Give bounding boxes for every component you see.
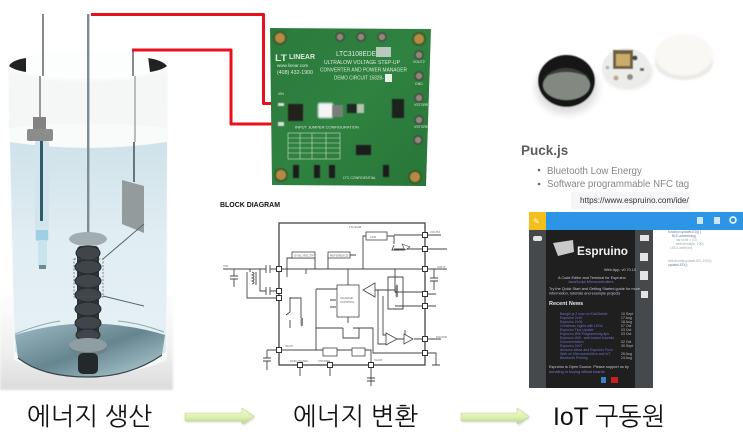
mounting holes (274, 32, 425, 183)
board silkscreen labels: VOUT2 (413, 60, 425, 64)
water (10, 142, 167, 372)
code editor text: BLE.advertising( (672, 234, 697, 238)
news list: Amazon Alexa and Espruino Puck (560, 348, 613, 352)
board silkscreen labels: INPUT JUMPER CONFIGURATION (295, 124, 359, 130)
panel: energy production beaker illustration (0, 14, 173, 390)
schematic labels: SYNC RECTIFY (294, 254, 316, 258)
board logo and title text (275, 47, 407, 82)
news list: 17 Aug (621, 316, 632, 320)
news list: Bluetooth Printing (560, 356, 588, 360)
schematic labels: CHARGE (340, 296, 353, 300)
arrow: conversion to IoT power (461, 408, 530, 426)
board logo and title text: www.linear.com (277, 63, 309, 68)
page text: Try the Quick Start and Getting Started guide for more (549, 287, 640, 291)
Espruino logo (553, 240, 628, 258)
schematic labels: VSTORE (318, 359, 330, 363)
news list: 03 Oct (621, 328, 631, 332)
schematic labels: VOUT (437, 265, 446, 269)
beaker glass (8, 52, 168, 376)
code editor text: setInterval(updateLED, 1000); (668, 259, 712, 263)
reference electrode (27, 14, 53, 269)
news list: Documentation (560, 340, 584, 344)
board logo and title text: (408) 432-1900 (277, 70, 313, 76)
news list: Espruino Wifi - web-based tutorials (560, 336, 614, 340)
board silkscreen labels: GND (415, 82, 423, 86)
panel: LTC3108 converter circuit board (270, 28, 431, 186)
news list: Espruino Wifi Programming tips (560, 332, 609, 336)
news list: 18 Aug (621, 320, 632, 324)
side rails (529, 230, 546, 388)
news list: Espruino 2v10 (560, 316, 582, 320)
news list: 10 Sept (621, 312, 633, 316)
code editor text: function updateLED() { (668, 230, 702, 234)
feature list: Bluetooth Low Energy (547, 166, 642, 177)
schematic labels: CONTROL (340, 300, 355, 304)
label: IoT power source: IoT 구동원 (553, 403, 665, 431)
jumper configuration table (288, 133, 340, 159)
schematic blocks (292, 232, 413, 356)
toolbar (546, 212, 743, 230)
Espruino logo: Espruino (577, 244, 628, 258)
schematic labels: PGOOD (436, 335, 448, 339)
board logo and title text: LTC3108EDE (336, 51, 376, 58)
panel: block diagram schematic (220, 200, 448, 386)
feature list (538, 166, 689, 190)
schematic labels: VLDO (374, 358, 383, 362)
news list: Espruino Tips Update (560, 328, 594, 332)
board logo and title text: CONVERTER AND POWER MANAGER (320, 68, 407, 74)
schematic labels: VOUT2 (430, 230, 440, 234)
schematic labels: VAUX (285, 344, 293, 348)
board logo and title text: ULTRALOW VOLTAGE STEP-UP (324, 60, 400, 66)
zoom callout lines (103, 224, 144, 306)
news list: Espruino 2v09 (560, 320, 582, 324)
page text: Recent News (549, 301, 583, 307)
feature list: Software programmable NFC tag (547, 179, 689, 190)
social buttons (601, 377, 606, 383)
schematic labels: REFERENCE (330, 254, 349, 258)
schematic labels: GND (SGND) (290, 359, 308, 363)
page text: JavaScript Microcontrollers (568, 280, 614, 284)
panel: Espruino IDE screenshot (529, 212, 743, 388)
panel: Puck.js product photo (521, 34, 713, 209)
arrow: production to conversion (185, 408, 255, 426)
board silkscreen labels: VIN (278, 92, 284, 96)
schematic labels: LDO (370, 235, 377, 239)
news list: 30 Sept (621, 344, 633, 348)
panel: Puck.js product photo: https://www.espruino.com/ide/ (580, 196, 689, 205)
counter electrode (122, 50, 144, 233)
news list: 03 Oct (621, 332, 631, 336)
news list: Espruino 2v07 (560, 344, 582, 348)
panel: Espruino IDE screenshot: Espruino is Open Source. Please support us by (549, 365, 629, 369)
code editor text: var level = 0.5; (676, 238, 698, 242)
news list: 02 Oct (621, 340, 631, 344)
chip outline and traces (223, 223, 447, 386)
page text (549, 268, 640, 307)
board logo and title text: DEMO CIRCUIT 1582B- (334, 76, 384, 82)
white silicone cover (655, 34, 713, 80)
news list: Bangle.js 2 now on KickStarter (560, 312, 608, 316)
panel: Espruino IDE screenshot: donating or buying official boards (549, 370, 605, 374)
page text: A Code Editor and Terminal for Espruino (558, 276, 626, 280)
board logo and title text: LT (275, 53, 287, 64)
page text: Web App, v0.70.10 (604, 268, 636, 272)
beaker floor reflection (15, 324, 165, 377)
schematic labels: LTC3108 (349, 225, 361, 229)
terminal pads (276, 232, 428, 368)
heading: block diagram: BLOCK DIAGRAM (220, 200, 280, 209)
board components (278, 99, 404, 178)
panel: Espruino IDE screenshot: ✎ (533, 217, 540, 226)
board logo and title text: LINEAR (289, 54, 315, 61)
red wires from electrodes to board (91, 14, 281, 124)
board silkscreen labels (278, 60, 429, 180)
code editor text: LED1.write(on); (670, 246, 693, 250)
label: energy production: 에너지 생산 (27, 403, 152, 431)
circuit disc (602, 48, 652, 89)
schematic labels (223, 225, 448, 363)
code editor text: setInterval(fn, 100); (676, 242, 704, 246)
page text: information, tutorials and example projects (549, 292, 620, 296)
board silkscreen labels: VSTORE (414, 125, 429, 129)
terminal panel (546, 230, 635, 388)
news list (560, 312, 633, 360)
board silkscreen labels: VSTORE (414, 103, 429, 107)
working electrode: twisted fibre (69, 14, 107, 374)
code editor text (668, 230, 712, 267)
news list: Christmas Lights with LEDs (560, 324, 603, 328)
news list: 24 Aug (621, 356, 632, 360)
news list: 07 Oct (621, 324, 631, 328)
label: energy conversion: 에너지 변환 (293, 403, 418, 431)
side icons (533, 235, 649, 298)
black puck case (536, 55, 598, 114)
top connectors (336, 33, 423, 144)
news list: Web on Microcontrollers and IoT (560, 352, 611, 356)
heading: Puck.js: Puck.js (521, 143, 568, 158)
board silkscreen labels: LTC CONFIDENTIAL (343, 176, 376, 180)
news list: 26 Aug (621, 352, 632, 356)
code editor text: updateLED(); (668, 263, 688, 267)
schematic labels: VIN (223, 264, 228, 268)
url label (571, 192, 690, 209)
